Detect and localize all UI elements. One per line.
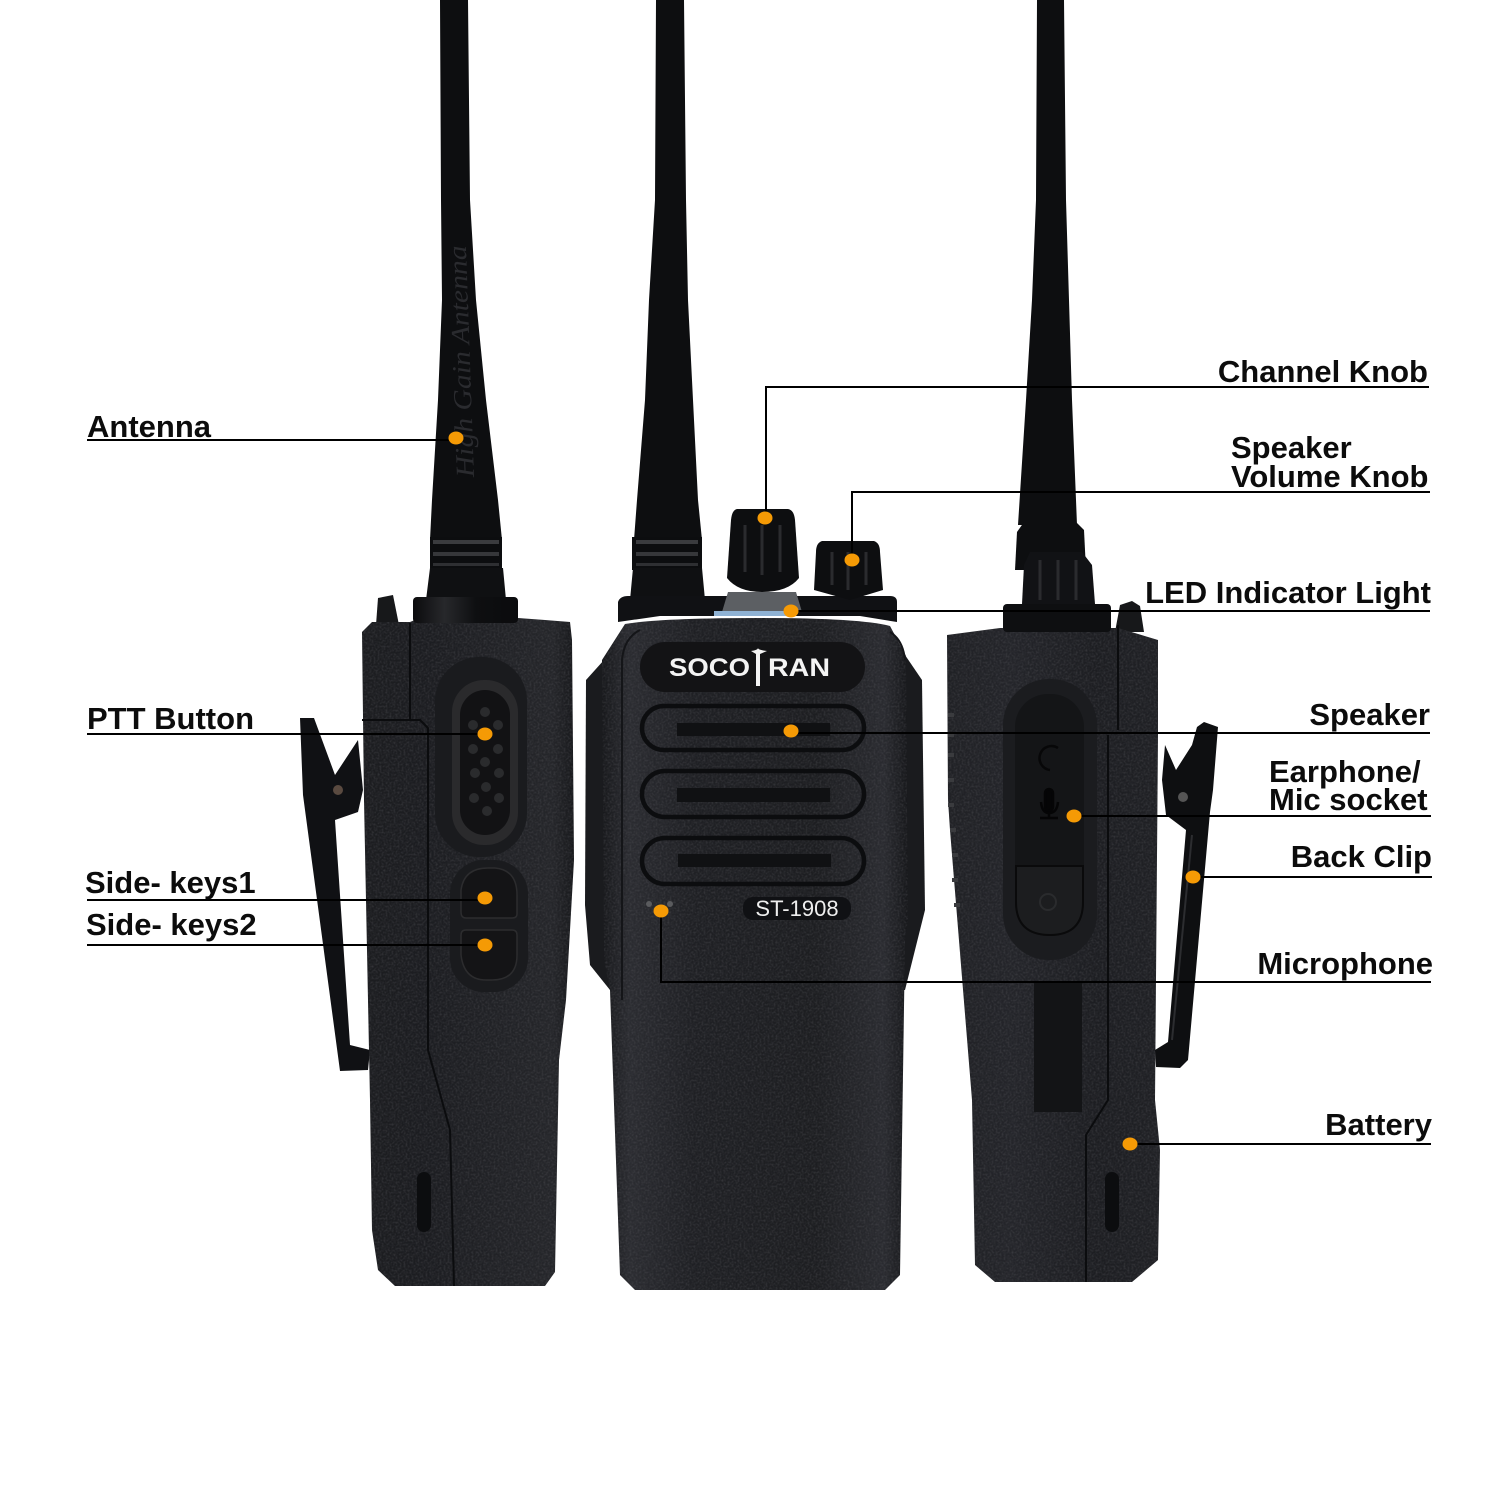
clip screw xyxy=(333,785,343,795)
antenna lettering: High Gain Antenna xyxy=(443,245,480,479)
collar xyxy=(1003,604,1111,632)
clip screw xyxy=(1178,792,1188,802)
label: Back Clip: Back Clip xyxy=(1291,839,1432,874)
socket surround xyxy=(1003,679,1097,960)
lower recess xyxy=(1034,982,1082,1112)
logo T xyxy=(751,648,767,686)
collar xyxy=(618,596,897,622)
lock tab xyxy=(1115,601,1144,632)
label: Speaker Volume Knob xyxy=(1231,430,1428,494)
lock tab xyxy=(376,595,399,625)
volume knob xyxy=(814,541,883,600)
label: Antenna: Antenna xyxy=(87,409,212,444)
antenna xyxy=(430,0,502,540)
model badge: ST-1908 xyxy=(755,896,839,921)
body xyxy=(602,618,908,1290)
antenna xyxy=(1018,0,1077,525)
label: Battery: Battery xyxy=(1325,1107,1433,1142)
PTT dots xyxy=(468,707,504,816)
clip groove xyxy=(1172,835,1192,1040)
icon: headset xyxy=(1040,746,1058,770)
speaker grille xyxy=(642,706,864,884)
cover lower part xyxy=(1016,866,1083,935)
label: PTT Button: PTT Button xyxy=(87,701,254,736)
right radio, side view xyxy=(947,0,1218,1282)
channel knob xyxy=(727,509,799,592)
body xyxy=(947,628,1160,1282)
antenna rings xyxy=(430,537,502,570)
body xyxy=(362,618,574,1286)
callout dots xyxy=(448,432,1200,1150)
antenna base xyxy=(630,568,705,600)
knob neck xyxy=(722,592,802,612)
microphone holes xyxy=(646,901,673,907)
label: Speaker Volume Knob: Volume Knob xyxy=(1231,459,1428,494)
side keys surround xyxy=(450,860,528,992)
logo plate xyxy=(640,642,865,692)
PTT button xyxy=(452,680,518,845)
rear knob xyxy=(1015,522,1086,570)
label: Side-keys1: Side- keys1 xyxy=(85,865,256,900)
center radio, front view xyxy=(585,0,925,1290)
label: Earphone/Mic socket xyxy=(1269,754,1428,817)
LED indicator strip xyxy=(714,611,790,616)
battery slot xyxy=(417,1172,431,1232)
label: Earphone/Mic socket: Mic socket xyxy=(1269,782,1428,817)
logo text end: RAN xyxy=(768,654,830,682)
battery slot xyxy=(1105,1172,1119,1232)
antenna base xyxy=(426,568,506,600)
body seams xyxy=(362,623,454,1286)
back clip xyxy=(300,718,370,1071)
label: Microphone: Microphone xyxy=(1257,946,1433,981)
collar xyxy=(413,597,518,623)
side key 1 xyxy=(461,868,517,918)
label: LED Indicator Light: LED Indicator Light xyxy=(1145,575,1431,610)
label: Speaker Volume Knob: Speaker xyxy=(1231,430,1352,465)
PTT face xyxy=(460,690,510,835)
front knob xyxy=(1022,552,1095,604)
antenna rings xyxy=(632,537,702,570)
front panel inset xyxy=(622,630,905,1000)
antenna xyxy=(634,0,702,540)
label: Speaker: Speaker xyxy=(1309,697,1430,732)
label: Side-keys2: Side- keys2 xyxy=(86,907,257,942)
leader lines xyxy=(87,387,1432,1144)
icon: power ring xyxy=(1040,894,1056,910)
side bumps xyxy=(585,655,925,990)
icon: microphone xyxy=(1040,789,1058,818)
PTT surround xyxy=(435,657,527,857)
back clip xyxy=(1155,722,1218,1068)
label: Channel Knob: Channel Knob xyxy=(1218,354,1428,389)
label: Earphone/Mic socket: Earphone/ xyxy=(1269,754,1421,789)
side key 2 xyxy=(461,930,517,980)
grip teeth xyxy=(948,715,960,905)
left radio, side view xyxy=(300,0,574,1286)
body seams xyxy=(1086,625,1160,1282)
earphone socket cover xyxy=(1015,694,1084,936)
logo text start: SOCO xyxy=(669,654,750,682)
